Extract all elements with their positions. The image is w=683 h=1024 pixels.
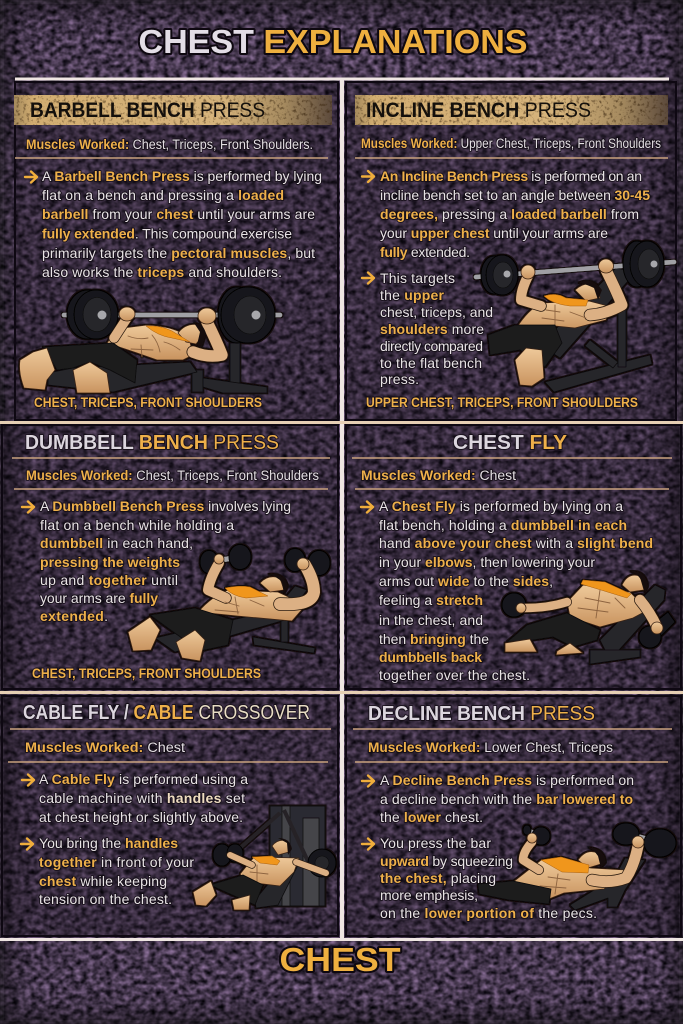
title: CHEST EXPLANATIONS <box>138 23 528 60</box>
description: primarily targets the pectoral muscles, but <box>42 245 315 261</box>
panel: incline bench press <box>355 95 674 410</box>
muscles worked: Muscles Worked: Chest <box>361 468 516 483</box>
description: A Barbell Bench Press is performed by lying <box>42 168 322 184</box>
heading band <box>355 95 668 125</box>
description: pressing the weights <box>40 554 180 570</box>
description: A Chest Fly is performed by lying on a <box>379 498 623 514</box>
description 1: your upper chest until your arms are <box>380 225 608 241</box>
description: dumbbell in each hand, <box>40 535 193 551</box>
heading: DECLINE BENCH PRESS <box>368 703 595 725</box>
description 1: A Cable Fly is performed using a <box>39 771 248 787</box>
illustration: barbell bench press <box>20 287 280 393</box>
description 2: the chest, placing <box>380 870 496 886</box>
description 2: tension on the chest. <box>39 891 172 907</box>
muscles worked: Muscles Worked: Chest, Triceps, Front Shoulders <box>26 468 319 483</box>
description: extended. <box>40 608 108 624</box>
description 1: cable machine with handles set <box>39 790 245 806</box>
description: together over the chest. <box>379 667 530 683</box>
description 1: at chest height or slightly above. <box>39 809 243 825</box>
muscles worked: Muscles Worked: Upper Chest, Triceps, Front Shoulders <box>361 136 661 151</box>
description 2: on the lower portion of the pecs. <box>380 905 597 921</box>
description 2 <box>39 835 194 907</box>
description 1 <box>380 772 634 825</box>
footer title: CHEST <box>280 941 400 978</box>
description 1: fully extended. <box>380 244 470 260</box>
description: feeling a stretch <box>379 592 483 608</box>
description <box>42 168 322 280</box>
arrow <box>362 171 374 182</box>
muscle caption: UPPER CHEST, TRICEPS, FRONT SHOULDERS <box>366 395 638 410</box>
description 2: You bring the handles <box>39 835 178 851</box>
description: then bringing the <box>379 631 489 647</box>
description 2: together in front of your <box>39 854 194 870</box>
panel: dumbbell bench press <box>12 432 330 681</box>
description 1: An Incline Bench Press is performed on an <box>380 168 642 184</box>
description 2: to the flat bench <box>380 355 482 371</box>
description: fully extended. This compound exercise <box>42 226 292 242</box>
description 2: shoulders more <box>380 321 484 337</box>
panel: decline bench press <box>353 703 676 921</box>
description: hand above your chest with a slight bend <box>379 535 653 551</box>
arrow <box>361 502 373 512</box>
description <box>40 498 291 624</box>
heading: CHEST FLY <box>453 432 568 454</box>
description: up and together until <box>40 572 178 588</box>
panel: chest fly <box>352 432 675 683</box>
description: flat on a bench while holding a <box>40 517 234 533</box>
illustration: chest fly <box>502 571 675 664</box>
description 2: more emphesis, <box>380 887 478 903</box>
panel: cable fly / cable crossover <box>8 702 336 910</box>
description 1: a decline bench with the bar lowered to <box>380 791 633 807</box>
muscle caption: CHEST, TRICEPS, FRONT SHOULDERS <box>34 395 262 410</box>
description 1: the lower chest. <box>380 809 483 825</box>
arrow <box>22 502 34 512</box>
heading band <box>14 95 332 125</box>
illustration: dumbbell bench press <box>128 544 330 661</box>
description 2: press. <box>380 371 419 387</box>
description: flat on a bench and pressing a loaded <box>42 187 284 203</box>
muscles worked: Muscles Worked: Lower Chest, Triceps <box>368 740 613 755</box>
arrow <box>25 172 37 182</box>
muscles worked: Muscles Worked: Chest <box>25 740 185 755</box>
description 1: degrees, pressing a loaded barbell from <box>380 206 639 222</box>
arrow <box>22 774 34 786</box>
description: in your elbows, then lowering your <box>379 554 595 570</box>
description 1: incline bench set to an angle between 30-45 <box>380 187 650 203</box>
description 2: chest while keeping <box>39 873 167 889</box>
description: arms out wide to the sides, <box>379 573 553 589</box>
description: your arms are fully <box>40 590 158 606</box>
arrow <box>21 838 33 850</box>
description: dumbbells back <box>379 649 482 665</box>
heading: INCLINE BENCH PRESS <box>366 99 591 122</box>
description: barbell from your chest until your arms are <box>42 206 315 222</box>
arrow <box>362 272 374 284</box>
arrow <box>362 776 374 786</box>
description: also works the triceps and shoulders. <box>42 264 282 280</box>
description 2: You press the bar <box>380 835 491 851</box>
panel: barbell bench press <box>14 95 332 410</box>
description: in the chest, and <box>379 612 483 628</box>
heading: DUMBBELL BENCH PRESS <box>25 432 279 454</box>
arrow <box>362 838 374 850</box>
description 1 <box>380 168 650 260</box>
description 2: directly compared <box>380 338 483 354</box>
description <box>379 498 653 683</box>
heading: BARBELL BENCH PRESS <box>30 99 265 122</box>
description 2 <box>380 270 493 387</box>
description 2: the upper <box>380 287 445 303</box>
description 2: chest, triceps, and <box>380 304 493 320</box>
muscles worked: Muscles Worked: Chest, Triceps, Front Shoulders. <box>26 137 313 152</box>
description 2: upward by squeezing <box>380 853 513 869</box>
heading: CABLE FLY / CABLE CROSSOVER <box>23 702 310 724</box>
muscle caption: CHEST, TRICEPS, FRONT SHOULDERS <box>32 666 261 681</box>
description: flat bench, holding a dumbbell in each <box>379 517 627 533</box>
description 1: A Decline Bench Press is performed on <box>380 772 634 788</box>
illustration: decline bench press <box>478 823 676 910</box>
illustration: incline bench press <box>476 241 674 392</box>
description 1 <box>39 771 248 825</box>
description 2: This targets <box>380 270 455 286</box>
description 2 <box>380 835 597 921</box>
description: A Dumbbell Bench Press involves lying <box>40 498 291 514</box>
illustration: cable fly <box>193 806 336 910</box>
